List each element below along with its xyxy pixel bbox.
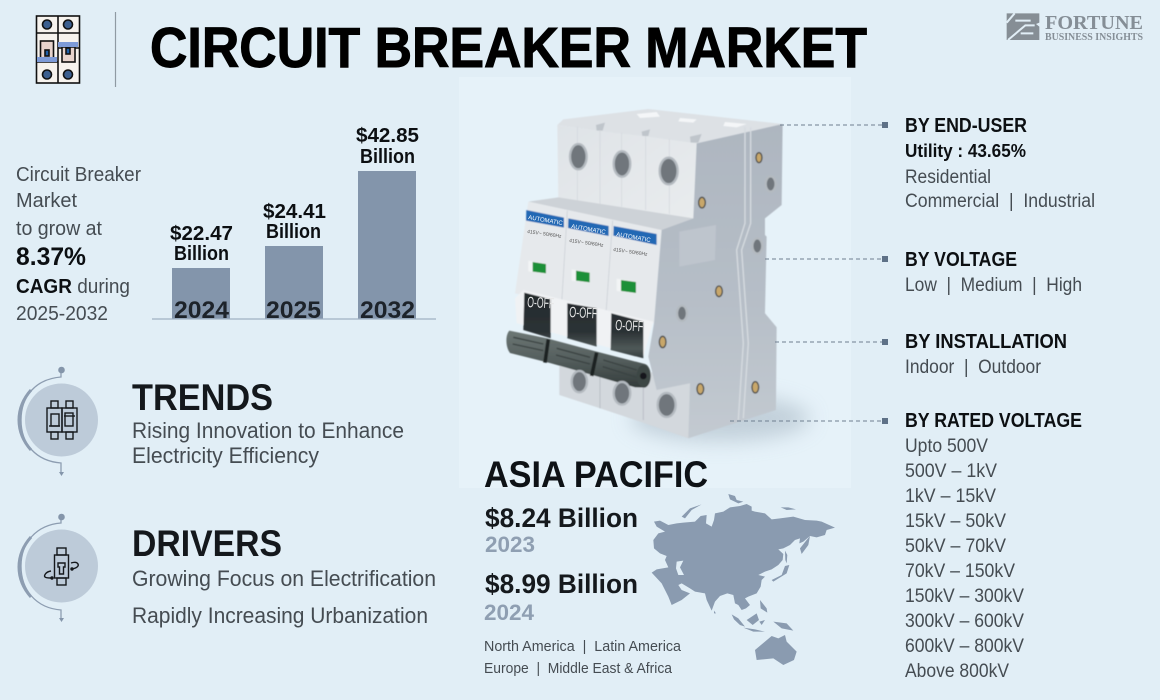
connector: rated voltage [730,418,888,424]
upper front [557,125,697,222]
icon: drivers [19,514,98,622]
bar chart: market size [152,125,436,324]
roller [506,331,651,388]
toggle housings [515,290,653,357]
connector: installation [775,339,888,345]
text block: market growth [16,164,141,325]
icon: circuit breaker header [36,16,80,83]
text block: other regions: Europe | Middle East & Africa [484,660,673,677]
product label text: AUTOMATIC [571,224,607,236]
stat: 2023 value: 2023 [485,532,535,557]
logo: Fortune Business Insights: FORTUNE [1045,12,1143,34]
segment: by rated voltage: 150kV – 300kV [905,586,1024,607]
product label text: 415V~ 50/60Hz [527,229,562,240]
stat: 2024 value: 2024 [484,600,535,625]
text block: market growth: Circuit Breaker [16,164,141,186]
stat: 2023 value: $8.24 Billion [485,503,638,533]
map: Asia Pacific [652,494,835,665]
product label text: O-OFF [569,304,598,322]
bar chart: market size: 2025 [266,297,321,324]
text block: market growth: 2025-2032 [16,303,108,325]
heading: drivers: DRIVERS [132,523,282,564]
connector: end-user [780,122,888,128]
lower front [559,363,697,438]
brass inserts [659,153,762,394]
segment: by rated voltage: Above 800kV [905,661,1009,682]
segment: by rated voltage: Upto 500V [905,436,988,457]
text block: drivers detail [132,566,436,628]
text block: market growth: 8.37% [16,243,86,271]
top face [557,109,783,145]
segment: by installation: BY INSTALLATION [905,331,1067,353]
icon: trends [19,367,98,476]
image: circuit breaker product [484,109,1095,682]
text block: other regions: North America | Latin America [484,638,682,655]
screws [570,144,776,417]
segment: by end-user: BY END-USER [905,115,1027,137]
green indicators [528,261,546,274]
product label text: O-OFF [527,294,555,312]
connector: voltage [765,256,888,262]
product label text: AUTOMATIC [616,232,652,244]
product label text: O-OFF [615,317,644,335]
segment: by end-user: Commercial | Industrial [905,191,1095,212]
segment: by rated voltage: 600kV – 800kV [905,636,1024,657]
product label text: 415V~ 50/60Hz [569,238,604,249]
bar chart: market size: Billion [174,243,229,265]
stat: 2024 value [484,569,638,625]
heading: trends: TRENDS [132,377,273,418]
stat: 2024 value: $8.99 Billion [485,569,638,599]
photo backdrop panel [459,77,851,488]
blue labels [526,210,657,245]
text block: other regions [484,638,682,677]
segment: by rated voltage: 500V – 1kV [905,461,997,482]
segment: by rated voltage: 1kV – 15kV [905,486,996,507]
text block: trends detail: Rising Innovation to Enhance [132,418,404,443]
title: CIRCUIT BREAKER MARKET [150,16,867,80]
module front faces [515,202,662,323]
segment: by end-user: Utility : 43.65% [905,141,1026,161]
logo: Fortune Business Insights [1007,12,1143,43]
text block: market growth: to grow at [16,218,102,240]
text block: market growth: CAGR during [16,276,130,298]
segment: by rated voltage: 300kV – 600kV [905,611,1024,632]
segment: by rated voltage [905,410,1082,682]
segment: by rated voltage: BY RATED VOLTAGE [905,410,1082,432]
logo: Fortune Business Insights: BUSINESS INSIGHTS [1045,32,1143,43]
segment: by rated voltage: 70kV – 150kV [905,561,1015,582]
text block: drivers detail: Rapidly Increasing Urbanization [132,603,428,628]
bar chart: market size: Billion [360,146,415,168]
stat: 2023 value [485,503,638,557]
segment: by end-user [905,115,1095,212]
text block: market growth: Market [16,190,77,212]
bar chart: market size: $42.85 [356,125,419,147]
segment: by rated voltage: 50kV – 70kV [905,536,1006,557]
segment: by installation [905,331,1067,378]
text block: trends detail: Electricity Efficiency [132,443,319,468]
segment: by installation: Indoor | Outdoor [905,357,1042,378]
segment: by voltage: BY VOLTAGE [905,249,1017,271]
heading: Asia Pacific: ASIA PACIFIC [484,454,708,495]
product label text: AUTOMATIC [528,215,564,227]
bar chart: market size: Billion [266,221,321,243]
product label text [527,215,652,335]
text block: drivers detail: Growing Focus on Electrification [132,566,436,591]
bar chart: market size: $24.41 [263,201,326,223]
shelf [528,197,693,231]
bar chart: market size: 2024 [174,297,230,324]
bar chart: market size: 2032 [360,297,415,324]
product label text: 415V~ 50/60Hz [613,247,648,258]
side [648,124,783,438]
bar chart: market size: $22.47 [170,223,233,245]
segment: by end-user: Residential [905,167,991,188]
text block: trends detail [132,418,404,468]
segment: by voltage: Low | Medium | High [905,275,1082,296]
segment: by voltage [905,249,1082,296]
segment: by rated voltage: 15kV – 50kV [905,511,1006,532]
